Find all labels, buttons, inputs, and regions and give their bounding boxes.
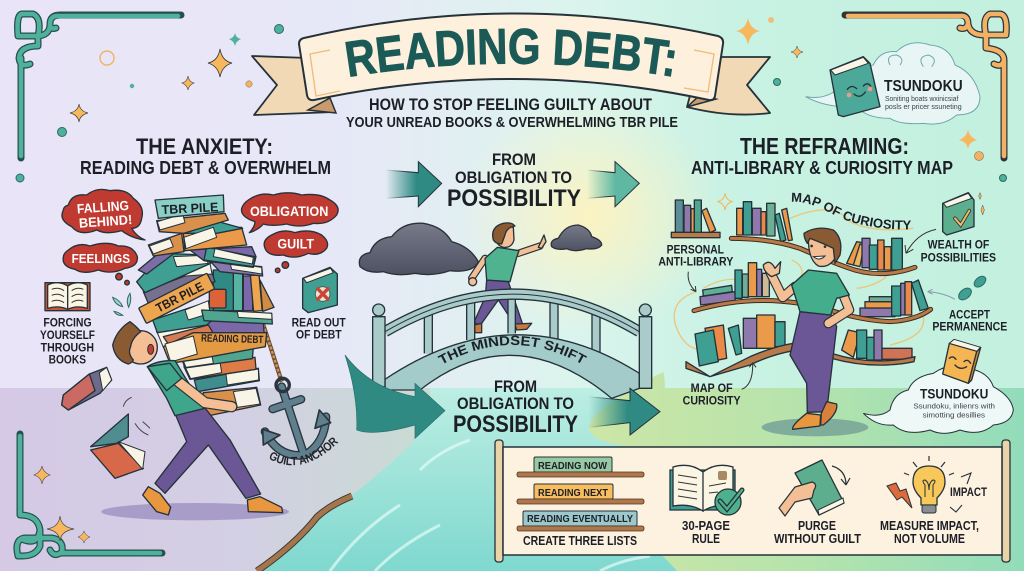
book character xyxy=(830,57,880,117)
label: forcing yourself through books: BOOKS xyxy=(49,353,86,367)
speech bubble: guilt xyxy=(264,231,328,273)
label: accept permanence: PERMANENCE xyxy=(932,320,1007,334)
upper books xyxy=(143,267,215,303)
speech bubble: falling behind xyxy=(62,189,145,240)
balusters xyxy=(428,297,596,353)
right ground xyxy=(589,372,1024,571)
corner ornament: bottom left xyxy=(17,434,162,556)
label: measure impact: MEASURE IMPACT, xyxy=(880,519,979,533)
icon: hand purging book xyxy=(779,460,850,516)
curiosity trails xyxy=(674,210,924,350)
panel: anxiety illustration xyxy=(40,188,386,520)
label: read out of debt xyxy=(292,316,346,342)
tab: reading next: READING NEXT xyxy=(538,487,609,499)
arrow to lower shelf xyxy=(742,363,756,389)
ground shadow xyxy=(762,418,868,436)
pants xyxy=(790,312,837,412)
dark cloud left xyxy=(359,223,478,275)
tab: reading eventually: READING EVENTUALLY xyxy=(527,513,633,525)
shelf two xyxy=(694,300,931,322)
label: 30-page rule: 30-PAGE xyxy=(682,519,730,533)
book character xyxy=(943,339,981,383)
center text: top: FROM xyxy=(492,150,536,169)
label: map of curiosity: MAP OF xyxy=(691,381,733,395)
heading: the reframing xyxy=(691,133,953,178)
center text: bottom: POSSIBILITY xyxy=(453,411,578,438)
label: accept permanence: ACCEPT xyxy=(949,307,991,321)
scroll body xyxy=(503,447,1002,555)
arrow to accept permanence xyxy=(928,289,955,299)
label: read out of debt: READ OUT xyxy=(292,316,346,330)
ribbon left tail xyxy=(252,56,335,115)
hair xyxy=(804,228,841,263)
ground shadow xyxy=(101,503,289,520)
subtitle: HOW TO STOP FEELING GUILTY ABOUT xyxy=(369,96,652,114)
bridge xyxy=(372,288,652,399)
arrow bottom right xyxy=(588,388,660,435)
tab: reading now: READING NOW xyxy=(538,460,607,472)
heading: the reframing: ANTI-LIBRARY & CURIOSITY MAP xyxy=(691,158,953,178)
neck and head xyxy=(808,235,837,266)
upright books xyxy=(209,269,274,311)
flag: tbr pile: TBR PILE xyxy=(161,200,219,217)
shelf three xyxy=(686,343,915,377)
shelf two books xyxy=(700,263,928,317)
left arm raised xyxy=(770,272,795,297)
small marks xyxy=(950,473,971,512)
description: posls er pricer ssuneting xyxy=(885,102,962,111)
speech bubble: guilt: GUILT xyxy=(277,237,315,252)
arrow top left xyxy=(386,162,442,207)
shelf one xyxy=(731,238,915,274)
label: purge without guilt: PURGE xyxy=(798,519,836,533)
heading: the reframing: THE REFRAMING: xyxy=(740,133,909,159)
bottom books xyxy=(203,387,261,416)
confident person xyxy=(763,228,849,429)
heading: the anxiety: READING DEBT & OVERWHELM xyxy=(80,158,331,178)
dark cloud right xyxy=(551,225,602,251)
center text: bottom: FROM xyxy=(494,377,537,396)
shelves xyxy=(517,472,644,531)
stressed person xyxy=(113,293,283,515)
sweat drops xyxy=(113,293,131,315)
label: create three lists: CREATE THREE LISTS xyxy=(523,534,637,548)
hair xyxy=(113,322,141,364)
pants xyxy=(155,407,261,498)
cloud xyxy=(806,43,980,124)
book: tbr pile xyxy=(139,273,215,323)
small shelf books xyxy=(671,200,720,238)
icon: open book with check xyxy=(670,465,742,515)
corner ornament: top right xyxy=(845,14,1006,158)
label: 30-page rule xyxy=(682,519,730,546)
subtitle xyxy=(346,96,678,131)
head xyxy=(124,331,157,364)
icon: lightning bolt xyxy=(887,483,912,508)
anchor xyxy=(263,378,331,455)
middle books xyxy=(157,320,264,347)
speech bubble: feelings: FEELINGS xyxy=(72,251,130,266)
sunlight glow xyxy=(460,95,720,335)
rope xyxy=(262,320,282,382)
ribbon body xyxy=(299,13,723,100)
label: personal anti-library xyxy=(658,242,733,269)
heading: the anxiety: THE ANXIETY: xyxy=(136,134,273,159)
sleeve xyxy=(147,363,182,391)
speech bubble: obligation: OBLIGATION xyxy=(250,204,328,219)
panel: reframing illustration xyxy=(658,192,1014,436)
shoes xyxy=(143,487,171,515)
shelf three books xyxy=(695,315,912,366)
speech bubble: feelings xyxy=(63,243,137,285)
icon: closed book with x xyxy=(303,267,337,313)
arrow top right xyxy=(587,162,639,207)
label: wealth of possibilities xyxy=(921,237,996,264)
left ground with shore xyxy=(0,388,430,571)
label: forcing yourself through books: FORCING xyxy=(43,316,92,330)
subtitle: YOUR UNREAD BOOKS & OVERWHELMING TBR PILE xyxy=(346,114,678,131)
arm xyxy=(178,382,232,407)
shelf one books xyxy=(737,202,902,270)
label: tsundoku: TSUNDOKU xyxy=(884,78,963,95)
shoes xyxy=(793,413,821,429)
center text: bottom xyxy=(453,377,578,438)
book: reading debt: READING DEBT xyxy=(201,332,264,346)
description: simotting desillies xyxy=(923,410,985,419)
deck label: the mindset shift: THE MINDSET SHIFT xyxy=(438,336,587,364)
arrow to shelf xyxy=(905,229,936,253)
speech bubble: falling behind: BEHIND! xyxy=(78,212,133,231)
label: map of curiosity xyxy=(683,381,741,407)
speech bubble: obligation xyxy=(241,193,338,233)
book: tbr pile: TBR PILE xyxy=(154,280,206,315)
panel: scroll of tips xyxy=(495,440,1010,562)
water river xyxy=(240,388,680,571)
label: TSUNDOKU xyxy=(920,385,988,401)
label: measure impact: NOT VOLUME xyxy=(894,532,965,546)
label: personal anti-library: PERSONAL xyxy=(667,242,724,256)
label: purge without guilt: WITHOUT GUILT xyxy=(774,532,861,546)
icon: open book xyxy=(45,283,90,311)
icon: lightbulb xyxy=(904,456,954,513)
handrail xyxy=(385,294,639,332)
label: forcing yourself through books: THROUGH xyxy=(41,340,94,354)
ribbon trim xyxy=(310,50,714,96)
title: READING DEBT: xyxy=(345,28,675,77)
label: purge without guilt xyxy=(774,519,861,546)
right arm xyxy=(828,295,849,323)
description: Soniting boats wxinicsiaf xyxy=(885,94,959,103)
panel: top tsundoku cloud xyxy=(806,43,980,124)
shirt xyxy=(147,361,205,416)
center text: top xyxy=(447,150,581,212)
heading: the anxiety xyxy=(80,134,331,178)
label: accept permanence xyxy=(932,307,1007,334)
sparkle xyxy=(718,193,732,210)
icon: footprints xyxy=(956,274,988,302)
hand xyxy=(763,262,781,277)
label: read out of debt: OF DEBT xyxy=(296,328,342,342)
falling book 2 xyxy=(91,397,150,478)
ribbon right tail xyxy=(687,57,770,115)
panel: mindset shift bridge xyxy=(344,160,661,439)
label: personal anti-library: ANTI-LIBRARY xyxy=(658,255,733,269)
description xyxy=(885,94,962,111)
description xyxy=(913,402,995,419)
walking person xyxy=(469,223,546,333)
pile of books xyxy=(137,195,274,416)
posts xyxy=(373,317,385,387)
label: forcing yourself through books: YOURSELF xyxy=(40,328,95,342)
mouth xyxy=(148,344,154,354)
center text: top: OBLIGATION TO xyxy=(455,168,572,187)
map of curiosity arc label: MAP OF CURIOSITY xyxy=(792,192,911,230)
title ribbon banner xyxy=(251,12,771,116)
label: wealth of possibilities: WEALTH OF xyxy=(928,237,989,251)
smile xyxy=(813,256,825,259)
label: measure impact xyxy=(880,519,979,546)
label: impact: IMPACT xyxy=(950,487,987,499)
center text: top: POSSIBILITY xyxy=(447,185,581,212)
arrow from personal anti-library xyxy=(688,272,696,292)
flag: tbr pile xyxy=(155,195,224,218)
arrow bottom left swoop xyxy=(345,355,445,438)
speech bubble: falling behind: FALLING xyxy=(76,198,129,216)
label: 30-page rule: RULE xyxy=(692,532,720,546)
shirt xyxy=(792,270,849,315)
deck xyxy=(385,335,639,398)
label: map of curiosity: CURIOSITY xyxy=(683,393,741,407)
label: forcing yourself through books xyxy=(40,316,95,367)
left shore line xyxy=(257,496,352,571)
water highlights xyxy=(330,440,650,571)
label: wealth of possibilities: POSSIBILITIES xyxy=(921,250,996,264)
book: reading debt xyxy=(163,332,267,363)
lower tsundoku cloud xyxy=(863,339,1013,433)
corner ornament: top left xyxy=(18,14,181,158)
icon: wealth book xyxy=(943,193,984,235)
scroll rollers xyxy=(495,440,503,562)
falling book 1 xyxy=(62,367,112,410)
description: Ssundoku, inlienrs with xyxy=(913,402,995,411)
center text: bottom: OBLIGATION TO xyxy=(457,394,574,413)
label: guilt anchor: GUILT ANCHOR xyxy=(270,438,338,466)
ribbon folds xyxy=(308,95,716,113)
